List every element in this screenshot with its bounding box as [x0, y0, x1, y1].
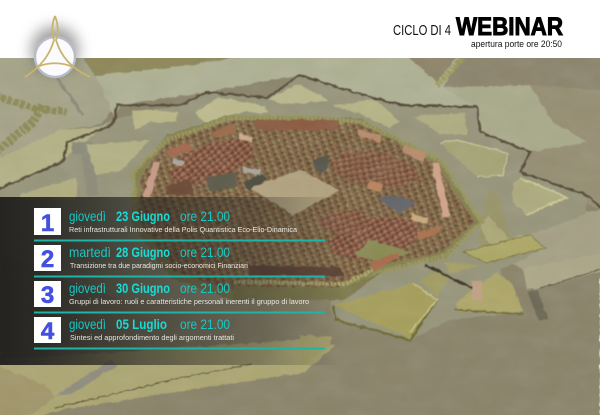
- session 3: 30 Giugno: [116, 280, 170, 296]
- outer dark wall lines: [0, 75, 600, 212]
- session 2: ore 21.00: [180, 244, 230, 260]
- major buildings: [255, 120, 338, 130]
- inner green ring and town ground: [130, 115, 480, 300]
- header title: WEBINAR: [456, 13, 563, 41]
- header title: [393, 13, 563, 49]
- session 2: [34, 244, 325, 278]
- session 3: Gruppi di lavoro: ruoli e caratteristiche personali inerenti il gruppo di lavoro: [69, 297, 309, 306]
- session 1: Reti infrastrutturali Innovative della Polis Quantistica Eco-Elio-Dinamica: [69, 225, 298, 234]
- trees at the left: [0, 95, 67, 112]
- session 2: 28 Giugno: [116, 244, 170, 260]
- session 4: ore 21.00: [180, 316, 230, 332]
- session 1: 1: [41, 210, 54, 237]
- session 2: 2: [41, 246, 54, 273]
- session 4: giovedì: [69, 316, 106, 332]
- header title: CICLO DI 4: [393, 22, 451, 39]
- fort body: [0, 75, 587, 340]
- session 1: [34, 208, 325, 242]
- dark schedule panel: [0, 197, 345, 365]
- session 3: [34, 280, 325, 314]
- session 1: 23 Giugno: [116, 208, 170, 224]
- header title: apertura porte ore 20:50: [471, 39, 562, 49]
- session 4: [34, 316, 325, 350]
- bastions east: [440, 140, 508, 177]
- tree wall around the town: [133, 117, 482, 296]
- session 1: giovedì: [69, 208, 106, 224]
- session 3: giovedì: [69, 280, 106, 296]
- logo: [25, 16, 90, 77]
- session 1: ore 21.00: [180, 208, 230, 224]
- central square: [250, 170, 340, 215]
- session 3: 3: [41, 282, 54, 309]
- session 2: Transizione tra due paradigmi socio-economici Finanziari: [70, 261, 248, 270]
- town block: [138, 120, 474, 292]
- bastions south: [463, 235, 545, 263]
- header band: [0, 0, 600, 58]
- session 4: 05 Luglio: [116, 316, 167, 332]
- session 3: ore 21.00: [180, 280, 230, 296]
- bastions north: [268, 84, 328, 104]
- session 4: 4: [41, 318, 55, 345]
- session 4: Sintesi ed approfondimento degli argomenti trattati: [70, 333, 234, 342]
- session 2: martedì: [69, 244, 111, 260]
